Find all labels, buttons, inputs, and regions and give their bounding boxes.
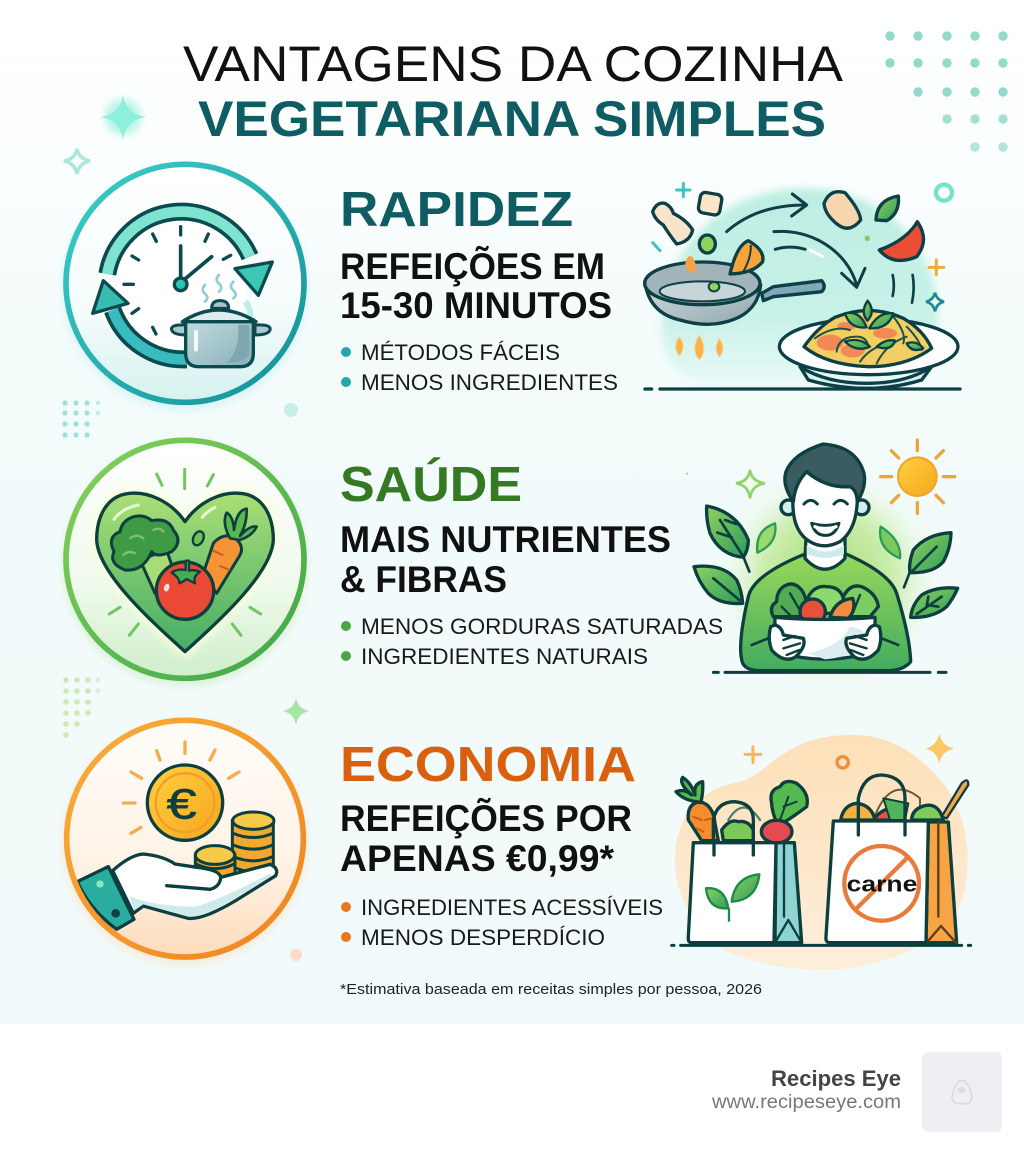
subheading: more nutrients and fibres: [340, 519, 671, 600]
icon: clock and pot: [57, 159, 313, 416]
icon: hand holding coins: [57, 714, 313, 971]
bullet list: economia: INGREDIENTES ACESSÍVEIS: [361, 895, 663, 920]
heading: saude: SAÚDE: [340, 457, 522, 512]
subheading: meals for only 0.99 euro: APENAS €0,99*: [340, 838, 615, 879]
subheading: meals for only 0.99 euro: REFEIÇÕES POR: [340, 797, 632, 839]
decoration: green sparkle: [282, 698, 310, 725]
decoration: mint dot: [284, 403, 298, 417]
title: VEGETARIANA SIMPLES: [198, 91, 826, 147]
brand logo placeholder: [922, 1052, 1002, 1132]
decoration: green dots: [63, 677, 100, 738]
illustration: smiling person with salad bowl: [686, 440, 958, 693]
heading: rapidez: RAPIDEZ: [340, 183, 573, 237]
subheading: meals for only 0.99 euro: [340, 797, 632, 879]
illustration: pan tossing food to pasta plate: [645, 183, 960, 389]
brand text: www.recipeseye.com: [711, 1092, 901, 1113]
decoration: peach dot: [290, 949, 302, 961]
title: [183, 36, 844, 147]
footnote: *Estimativa baseada em receitas simples por pessoa, 2026: [340, 981, 762, 998]
bullet list: saude: INGREDIENTES NATURAIS: [361, 644, 648, 669]
subheading: more nutrients and fibres: MAIS NUTRIENTES: [340, 519, 671, 560]
bullet list: rapidez: MÉTODOS FÁCEIS: [361, 340, 560, 365]
heading: economia: ECONOMIA: [340, 738, 636, 792]
subheading: meals in 15-30 minutes: REFEIÇÕES EM: [340, 245, 605, 287]
bullet list: economia: MENOS DESPERDÍCIO: [361, 925, 605, 950]
bullet list: rapidez: MENOS INGREDIENTES: [361, 370, 618, 395]
footer strip: [0, 1024, 1024, 1154]
title: VANTAGENS DA COZINHA: [183, 36, 844, 92]
brand text: [711, 1066, 901, 1113]
illustration: shopping bags without meat: [672, 733, 971, 970]
panel: economia: [57, 714, 971, 971]
bullet list: saude: [341, 614, 723, 669]
subheading: meals in 15-30 minutes: [340, 245, 612, 326]
subheading: meals in 15-30 minutes: 15-30 MINUTOS: [340, 285, 612, 326]
decoration: top right dot grid: [885, 31, 1008, 152]
icon: hand holding coins: €: [167, 781, 197, 829]
brand text: Recipes Eye: [771, 1066, 901, 1091]
decoration: teal dots: [62, 400, 100, 438]
bullet list: rapidez: [341, 340, 618, 395]
decoration: outline sparkle: [64, 149, 90, 174]
panel: saude: [57, 435, 958, 693]
illustration: shopping bags without meat: carne: [847, 871, 917, 896]
subheading: more nutrients and fibres: & FIBRAS: [340, 559, 507, 600]
bullet list: saude: MENOS GORDURAS SATURADAS: [361, 614, 723, 639]
panel: rapidez: [57, 159, 960, 416]
decoration: mint sparkle: [101, 95, 146, 140]
bullet list: economia: [341, 895, 663, 950]
icon: heart with vegetables: [57, 435, 313, 692]
